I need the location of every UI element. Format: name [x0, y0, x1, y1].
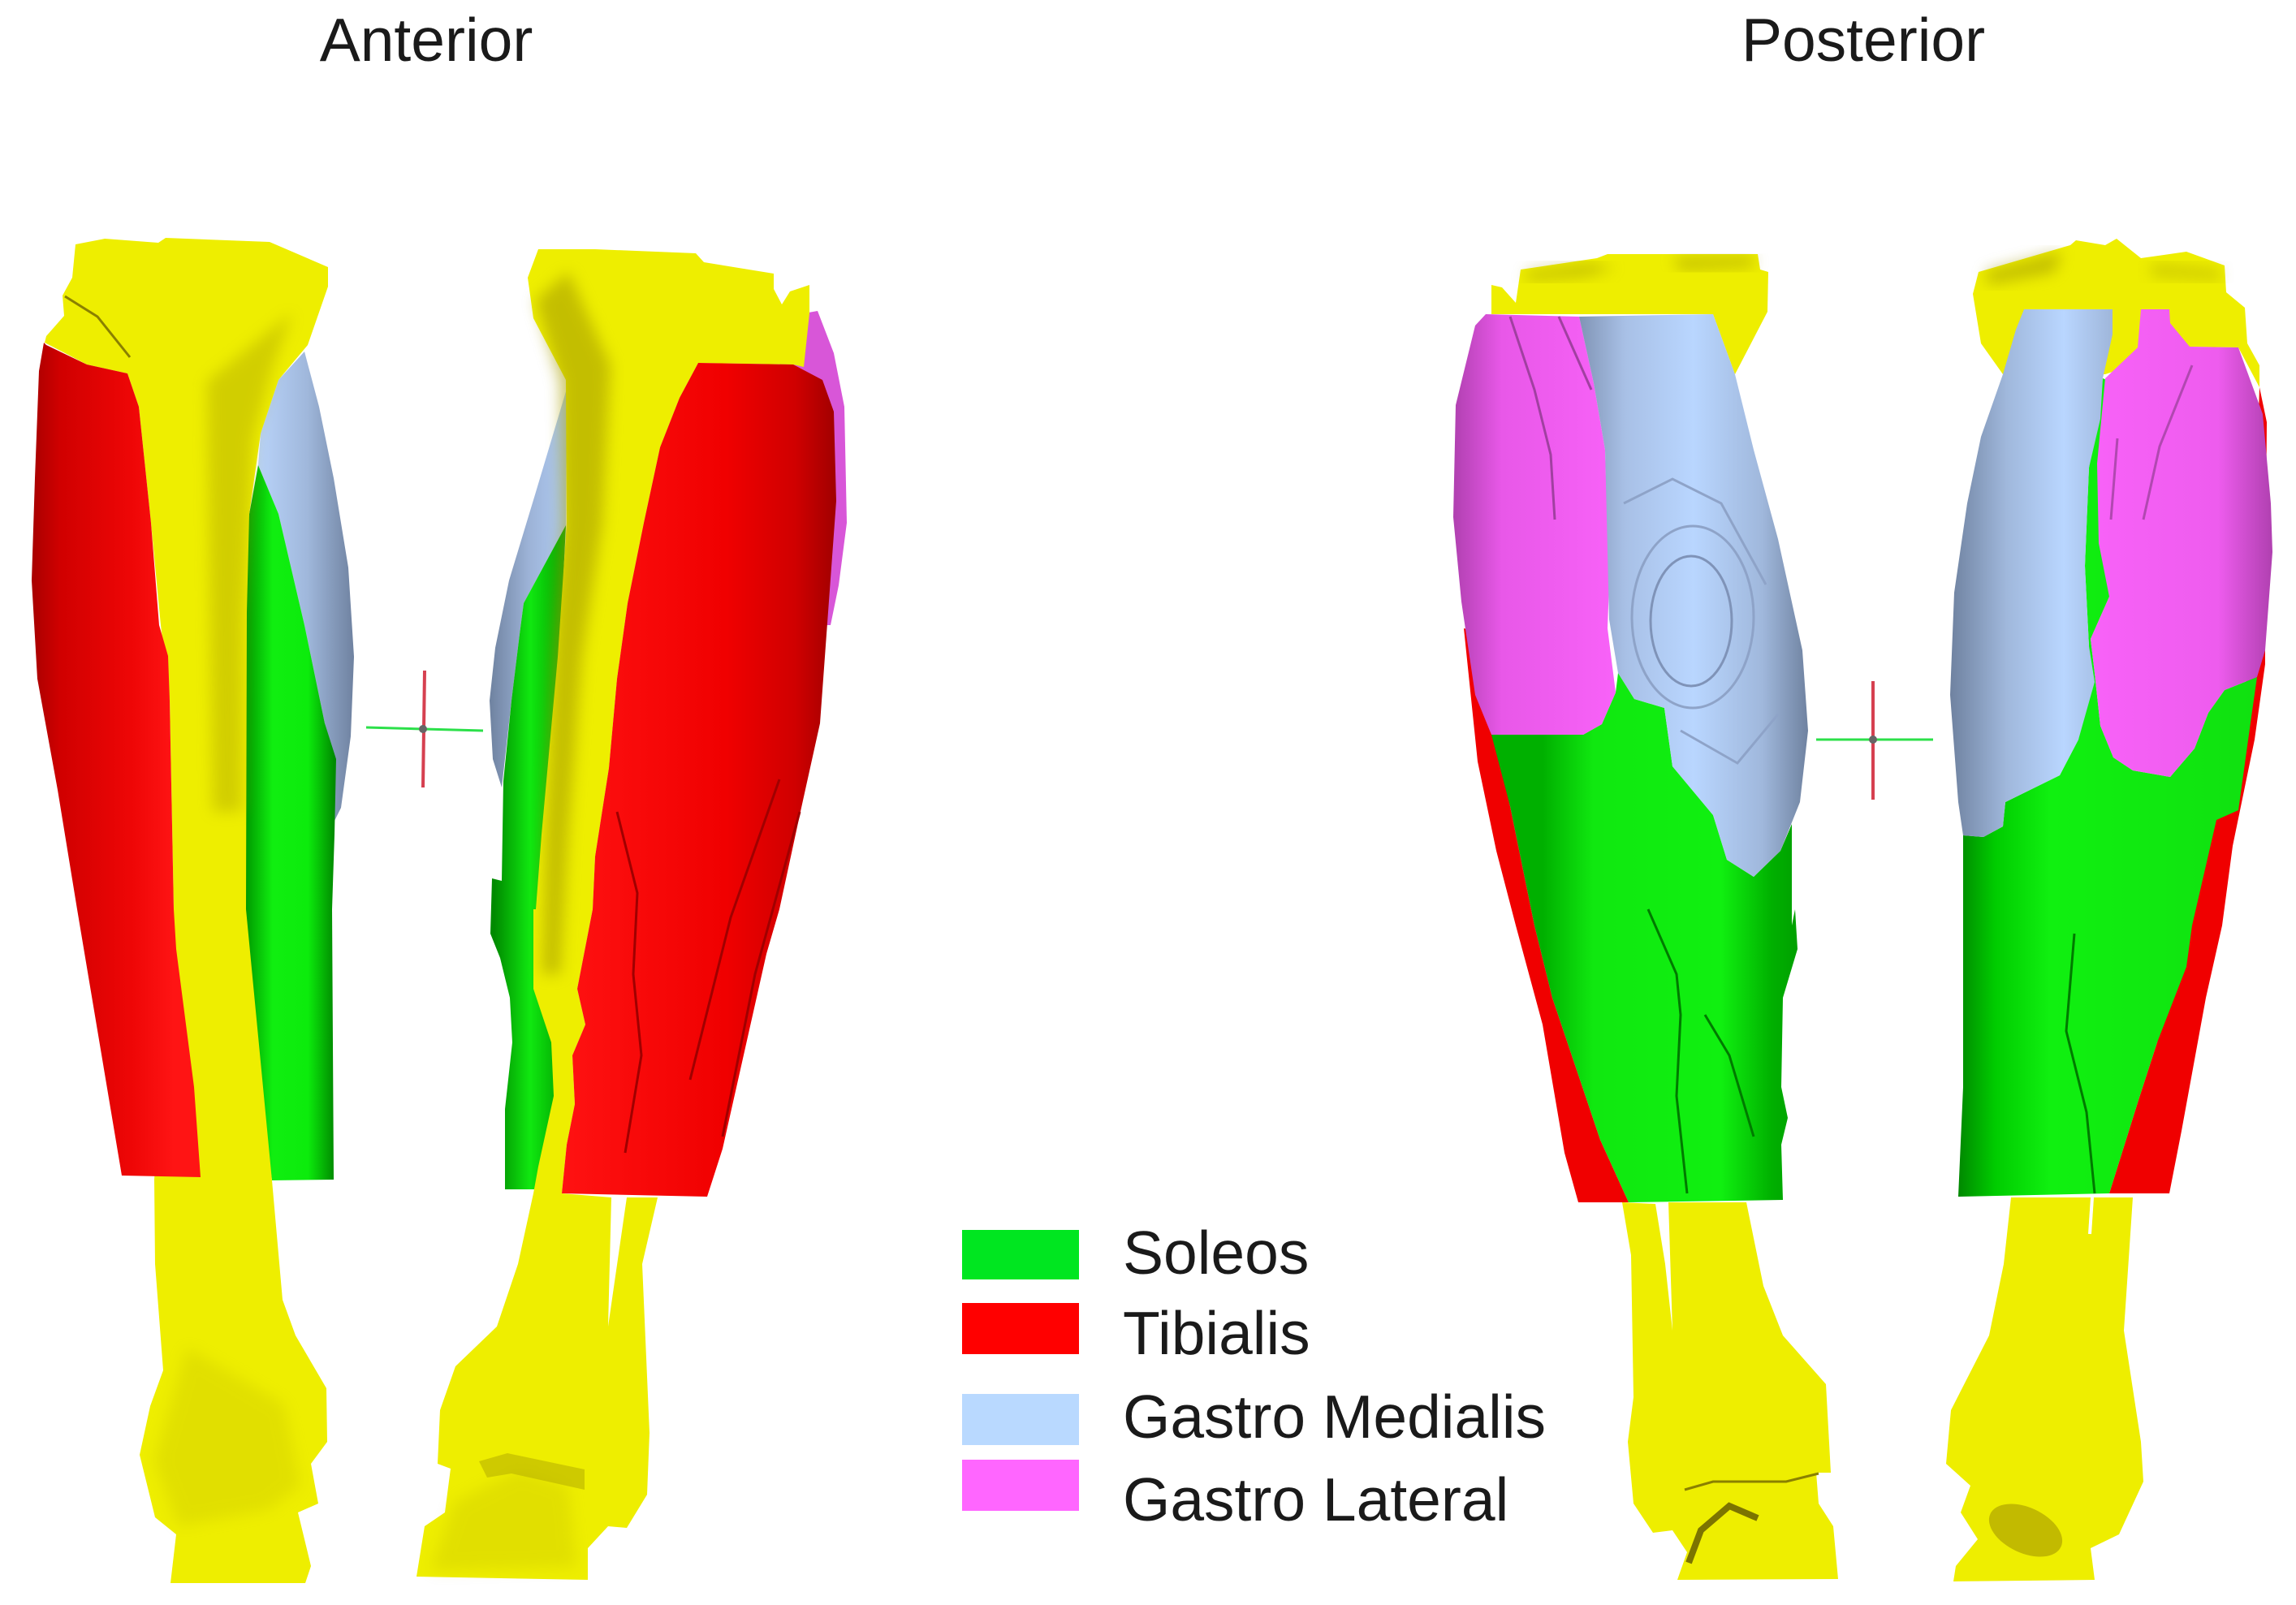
legend item: Tibialis: [962, 1299, 1310, 1367]
gastro lateral muscle: [2091, 309, 2272, 777]
legend: [962, 1219, 1546, 1534]
gastro lateral muscle: [779, 311, 847, 625]
legend item: Soleos: Soleos: [1123, 1219, 1309, 1287]
gastro medialis muscle: [1579, 314, 1808, 877]
crosshair marker: posterior: [1816, 681, 1933, 800]
gastro medialis muscle: [1950, 309, 2113, 837]
femur and foot bones: [1491, 254, 1768, 374]
legend item: Gastro Medialis: Gastro Medialis: [1123, 1383, 1546, 1451]
legend item: Soleos: [962, 1219, 1309, 1287]
tibia and fibula bone: [1622, 1202, 1838, 1580]
heading: Anterior: Anterior: [320, 6, 533, 74]
soleus muscle: [1958, 378, 2257, 1197]
anterior leg, right view: [416, 249, 847, 1580]
legend item: Gastro Lateral: [962, 1460, 1508, 1534]
anterior leg, left view: [32, 238, 354, 1583]
tibialis muscle: [562, 363, 836, 1197]
legend item: Gastro Lateral: Gastro Lateral: [1123, 1465, 1508, 1534]
gastro medialis muscle: [258, 352, 354, 821]
gastro lateral muscle: [1453, 314, 1616, 735]
heading: Posterior: Posterior: [1741, 6, 1985, 74]
tibialis muscle: [2109, 387, 2267, 1193]
femur bone top: [1973, 239, 2259, 387]
tibialis muscle: [32, 343, 201, 1177]
posterior leg, left view: [1453, 254, 1838, 1580]
tibia and fibula bone: [45, 238, 328, 1583]
gastro medialis muscle: [490, 389, 567, 787]
tibialis muscle: [1464, 628, 1629, 1202]
crosshair marker: anterior: [366, 671, 483, 787]
soleus muscle: [1491, 673, 1798, 1202]
tibia and fibula bone: [416, 249, 809, 1580]
posterior leg, right view: [1946, 239, 2272, 1581]
legend item: Tibialis: Tibialis: [1123, 1299, 1310, 1367]
tibia and fibula bone: [1946, 1197, 2143, 1581]
soleus muscle: [490, 525, 568, 1189]
soleus muscle: [235, 465, 336, 1180]
